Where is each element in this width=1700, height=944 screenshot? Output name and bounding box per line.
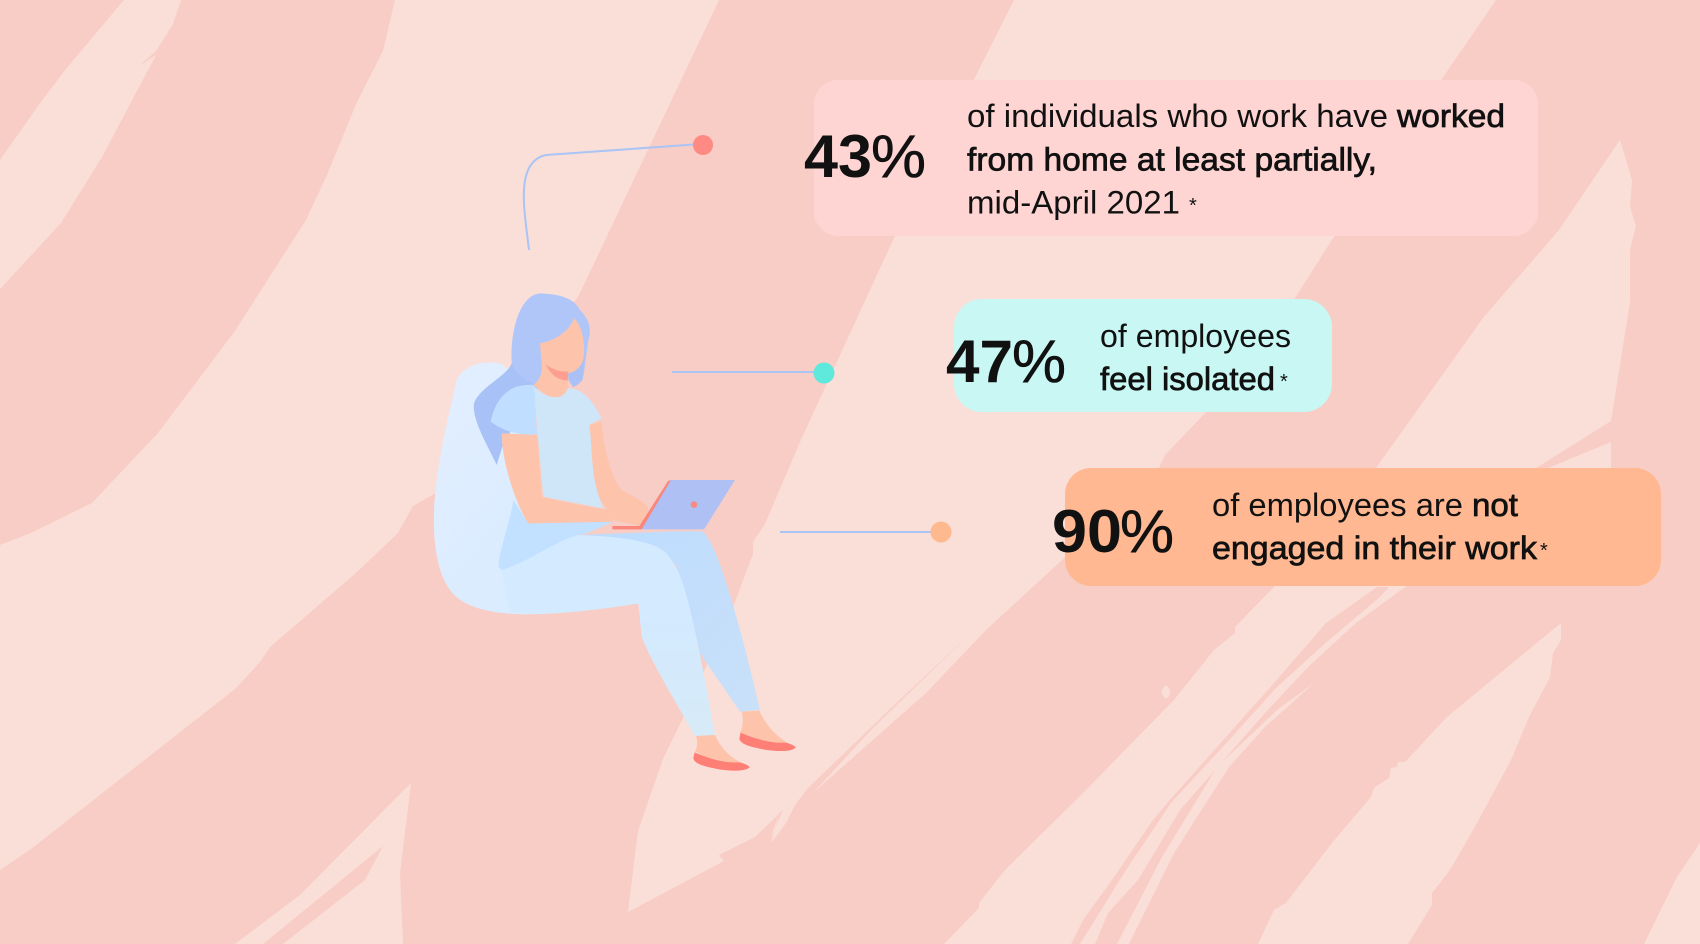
stat: 47%: [946, 328, 1066, 395]
shirt lower: [498, 500, 613, 570]
illustration: woman on beanbag with laptop: [434, 293, 796, 771]
back arm: [588, 422, 648, 527]
front foot: [693, 735, 750, 771]
description: feel isolated: of employees: [1100, 318, 1291, 354]
sleeve: [491, 385, 537, 435]
face and neck: [533, 318, 584, 397]
connector: not engaged: [780, 522, 952, 542]
stat: 90%: 90: [1052, 498, 1122, 565]
front arm: [502, 433, 613, 523]
front lower leg: [638, 553, 715, 736]
stat: 47%: 47: [946, 328, 1013, 395]
connector: feel isolated: [672, 362, 834, 384]
neck shadow: [546, 364, 568, 381]
back leg: [577, 531, 760, 712]
panel: feel isolated: [946, 299, 1332, 412]
hair strand: [568, 357, 584, 387]
stat: 43%: %: [871, 123, 926, 190]
hair back: [474, 363, 540, 465]
description: worked from home: worked: [1396, 98, 1505, 134]
shirt: [533, 385, 603, 508]
panel: worked from home: [804, 80, 1538, 236]
description: feel isolated: *: [1280, 371, 1288, 393]
description: not engaged: engaged in their work: [1212, 530, 1538, 566]
connector: worked from home: [524, 135, 713, 250]
description: not engaged: not: [1472, 487, 1518, 523]
description: not engaged: [1212, 487, 1548, 566]
stat: 90%: [1052, 498, 1174, 565]
stat: 43%: [804, 123, 926, 190]
description: feel isolated: [1100, 318, 1291, 397]
panel: not engaged: [1052, 468, 1661, 586]
laptop: [612, 480, 735, 529]
back foot: [739, 711, 796, 751]
beanbag chair: [434, 362, 640, 614]
description: worked from home: mid-April 2021: [967, 184, 1180, 220]
description: not engaged: of employees are: [1212, 487, 1463, 523]
description: worked from home: *: [1189, 195, 1197, 217]
description: worked from home: [967, 98, 1505, 220]
description: worked from home: from home at least partially,: [967, 142, 1377, 178]
description: not engaged: *: [1540, 540, 1548, 562]
thigh: [502, 535, 687, 613]
stat: 43%: 43: [804, 123, 872, 190]
stat: 90%: %: [1120, 498, 1174, 565]
hair top: [511, 293, 590, 387]
description: feel isolated: feel isolated: [1100, 361, 1275, 397]
description: worked from home: of individuals who work have: [967, 98, 1388, 134]
stat: 47%: %: [1012, 328, 1066, 395]
